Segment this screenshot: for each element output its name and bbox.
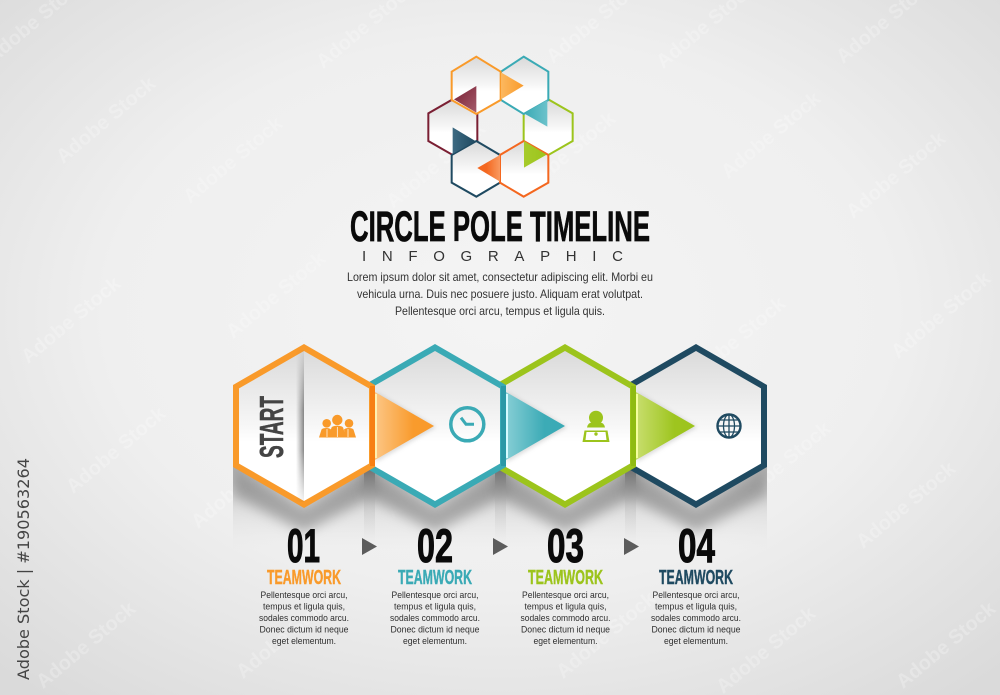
start label: START <box>253 396 290 458</box>
step 1: Pellentesque orci arcu, <box>260 590 348 601</box>
intro text: Pellentesque orci arcu, tempus et ligula quis. <box>395 304 605 318</box>
watermark pattern: Adobe Stock <box>887 267 996 363</box>
watermark pattern: Adobe Stock <box>842 127 951 223</box>
icon: person at laptop <box>582 411 610 442</box>
arrow 3 green <box>631 386 697 466</box>
watermark pattern: Adobe Stock <box>52 72 161 168</box>
step 2: sodales commodo arcu. <box>390 613 480 624</box>
icon: globe <box>718 414 740 438</box>
step 3 <box>520 519 610 647</box>
watermark pattern: Adobe Stock <box>382 117 491 213</box>
watermark pattern: Adobe Stock <box>892 597 1000 693</box>
title: CIRCLE POLE TIMELINE <box>350 203 650 251</box>
step 2 <box>390 519 480 647</box>
intro text <box>347 270 653 318</box>
step 2: tempus et ligula quis, <box>394 602 476 612</box>
step 4: Donec dictum id neque <box>652 624 740 636</box>
step 3: Donec dictum id neque <box>521 624 610 636</box>
watermark pattern: Adobe Stock <box>552 587 661 683</box>
step 4 <box>651 519 741 647</box>
step 4: eget elementum. <box>664 636 728 647</box>
hexagon 3 green <box>497 348 633 504</box>
step 2: TEAMWORK <box>398 567 472 589</box>
arrow 1 orange <box>370 386 436 466</box>
subtitle: INFOGRAPHIC <box>362 248 623 265</box>
step 4: sodales commodo arcu. <box>651 613 741 624</box>
step 2: Donec dictum id neque <box>390 624 480 636</box>
step arrow 3 <box>624 538 639 555</box>
step 1: Donec dictum id neque <box>260 624 348 636</box>
step 3: tempus et ligula quis, <box>524 602 606 612</box>
step 4: tempus et ligula quis, <box>655 602 737 612</box>
watermark pattern: Adobe Stock <box>682 292 791 388</box>
step 3: TEAMWORK <box>528 567 603 589</box>
watermark pattern: Adobe Stock <box>512 107 621 203</box>
icon: team <box>319 415 356 438</box>
step 3: eget elementum. <box>534 636 598 647</box>
watermark pattern: Adobe Stock <box>187 437 296 533</box>
watermark pattern: Adobe Stock <box>32 597 141 693</box>
watermark pattern: Adobe Stock <box>717 87 826 183</box>
hexagon 4 navy <box>628 348 764 504</box>
hexagon floor shadows <box>233 467 767 538</box>
step 2: 02 <box>417 519 453 572</box>
start fold shadow <box>296 350 304 502</box>
hexagon 1 orange <box>236 348 372 504</box>
step 3: Pellentesque orci arcu, <box>522 590 609 601</box>
step 1: tempus et ligula quis, <box>263 602 345 612</box>
watermark pattern: Adobe Stock <box>727 417 836 513</box>
arrow 2 teal <box>501 386 567 466</box>
icon: clock <box>451 408 484 441</box>
watermark pattern: Adobe Stock <box>382 427 491 523</box>
step 3: 03 <box>547 519 584 572</box>
watermark pattern: Adobe Stock <box>62 402 171 498</box>
step 1: TEAMWORK <box>267 567 341 589</box>
step arrow 2 <box>493 538 508 555</box>
step 4: TEAMWORK <box>659 567 733 589</box>
hexagon 2 teal <box>367 348 503 504</box>
step 1: 01 <box>287 519 320 572</box>
watermark pattern: Adobe Stock <box>17 272 126 368</box>
step 3: sodales commodo arcu. <box>520 613 610 624</box>
step arrow 1 <box>362 538 377 555</box>
watermark pattern: Adobe Stock <box>852 457 961 553</box>
step 2: eget elementum. <box>403 636 467 647</box>
intro text: Lorem ipsum dolor sit amet, consectetur adipiscing elit. Morbi eu <box>347 270 653 284</box>
watermark pattern: Adobe Stock <box>222 247 331 343</box>
step 2: Pellentesque orci arcu, <box>392 590 478 601</box>
stock id vertical text: Adobe Stock | #190563264 <box>14 458 33 680</box>
watermark pattern: Adobe Stock <box>179 112 288 208</box>
step 4: Pellentesque orci arcu, <box>652 590 740 601</box>
watermark pattern: Adobe Stock <box>232 587 341 683</box>
logo: hexagon flower <box>428 57 573 197</box>
step 1: eget elementum. <box>272 636 336 647</box>
step 1 <box>259 519 349 647</box>
step 1: sodales commodo arcu. <box>259 613 349 624</box>
step 4: 04 <box>678 519 715 572</box>
intro text: vehicula urna. Duis nec posuere justo. Aliquam erat volutpat. <box>357 287 643 301</box>
timeline hexagons <box>236 348 764 504</box>
